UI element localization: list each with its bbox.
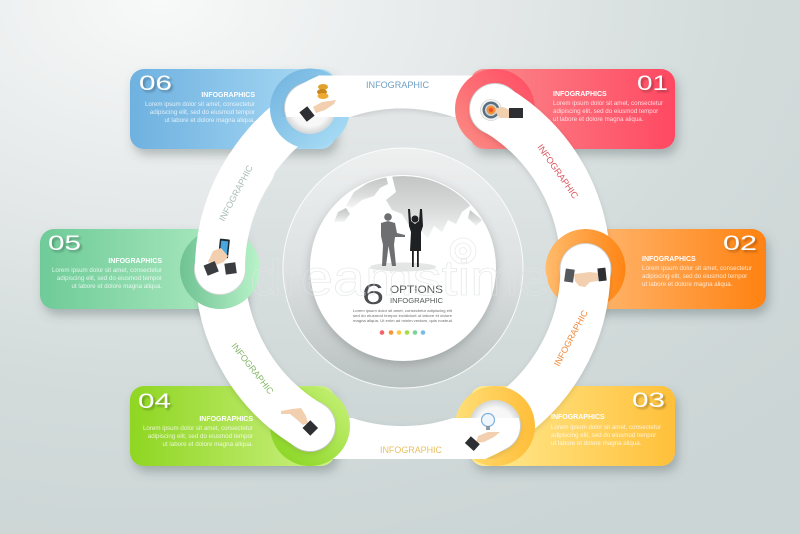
people: [370, 209, 436, 272]
icon: hand with coins: [299, 84, 336, 122]
watermark: dreamstime: [250, 250, 550, 306]
center paragraph: magna aliqua. Ut enim ad minim veniam, quis nostrud: [353, 318, 452, 323]
text block 04: INFOGRAPHICS: [199, 416, 253, 423]
big numeral 6: 6: [362, 279, 384, 311]
inner ring disc: [244, 108, 562, 426]
text block 06: Lorem ipsum dolor sit amet, consectetur: [145, 101, 255, 108]
world map: [334, 175, 482, 238]
number 01: 01: [637, 72, 668, 95]
ring 06: [270, 68, 350, 148]
number 05: 05: [48, 232, 81, 255]
text block 02: ut labore et dolore magna aliqua.: [642, 281, 733, 288]
text block 05: INFOGRAPHICS: [108, 258, 162, 265]
ribbon label lower right: INFOGRAPHIC: [552, 308, 590, 368]
text block 01: [553, 91, 663, 123]
ring 04: [270, 386, 350, 466]
text block 03: ut labore et dolore magna aliqua.: [551, 440, 642, 447]
icon: hand pointing: [281, 408, 318, 436]
ribbon label bottom: INFOGRAPHIC: [380, 445, 442, 455]
text block 01: Lorem ipsum dolor sit amet, consectetur: [553, 100, 663, 107]
text block 06: [145, 92, 255, 124]
ring 05: [180, 229, 260, 309]
text block 03: adipiscing elit, sed do eiusmod tempor: [551, 432, 656, 439]
text block 03: [551, 414, 661, 447]
text block 01: ut labore et dolore magna aliqua.: [553, 116, 644, 123]
card 03: [470, 386, 675, 466]
colour dots: [380, 330, 425, 335]
ribbon label top: INFOGRAPHIC: [366, 80, 429, 90]
icon: bulb on hand: [465, 414, 500, 451]
card 06: [130, 69, 335, 149]
text block 04: [143, 416, 253, 448]
text block 04: ut labore et dolore magna aliqua.: [163, 441, 253, 448]
text block 04: Lorem ipsum dolor sit amet, consectetur: [143, 425, 253, 432]
heading infographic: INFOGRAPHIC: [390, 296, 444, 305]
text block 04: adipiscing elit, sed do eiusmod tempor: [148, 433, 253, 440]
icon: hand on target: [480, 100, 523, 120]
ribbon 05 to 06, upper part: [244, 108, 310, 176]
ribbon label upper right: INFOGRAPHIC: [535, 142, 581, 201]
text block 02: [642, 256, 752, 288]
text block 03: INFOGRAPHICS: [551, 414, 605, 421]
ribbon label upper left: INFOGRAPHIC: [217, 163, 255, 223]
ribbon 06 to 01: [310, 83, 495, 109]
number 06: 06: [139, 72, 172, 95]
ring 03: [455, 386, 535, 466]
text block 01: INFOGRAPHICS: [553, 91, 607, 98]
card 01: [470, 69, 675, 149]
center paragraph: Lorem ipsum dolor sit amet, consectetur adipiscing elit: [353, 308, 453, 313]
text block 02: Lorem ipsum dolor sit amet, consectetur: [642, 265, 752, 272]
text block 02: adipiscing elit, sed do eiusmod tempor: [642, 273, 747, 280]
text block 06: INFOGRAPHICS: [201, 92, 255, 99]
ribbon 01 to 02: [495, 109, 586, 269]
card 05: [40, 229, 245, 309]
ribbon 03 to 04: [310, 426, 495, 451]
text block 02: INFOGRAPHICS: [642, 256, 696, 263]
text block 05: adipiscing elit, sed do eiusmod tempor: [57, 275, 162, 282]
card 02: [560, 229, 766, 309]
center circle: [310, 175, 496, 361]
ribbon 04 to 05: [220, 269, 310, 426]
ribbon 02 to 03: [495, 269, 586, 426]
number 04: 04: [138, 390, 171, 413]
text block 06: adipiscing elit, sed do eiusmod tempor: [150, 109, 255, 116]
text block 05: ut labore et dolore magna aliqua.: [72, 283, 162, 290]
text block 01: adipiscing elit, sed do eiusmod tempor: [553, 108, 658, 115]
number 03: 03: [632, 389, 665, 412]
text block 06: ut labore et dolore magna aliqua.: [165, 117, 255, 124]
icon: handshake: [564, 268, 607, 287]
heading options: OPTIONS: [390, 284, 443, 296]
text block 05: Lorem ipsum dolor sit amet, consectetur: [52, 267, 162, 274]
text block 03: Lorem ipsum dolor sit amet, consectetur: [551, 424, 661, 431]
ribbon 05 to 06, lower part: [220, 168, 250, 269]
ring 01: [455, 69, 535, 149]
ribbon label lower left: INFOGRAPHIC: [229, 341, 276, 396]
icon: hands holding phone: [204, 239, 237, 276]
card 04: [130, 386, 335, 466]
center paragraph: [353, 308, 453, 323]
text block 05: [52, 258, 162, 290]
ring 02: [546, 229, 626, 309]
number 02: 02: [723, 232, 757, 255]
center paragraph: sed do eiusmod tempor incididunt ut labore et dolore: [353, 313, 453, 318]
